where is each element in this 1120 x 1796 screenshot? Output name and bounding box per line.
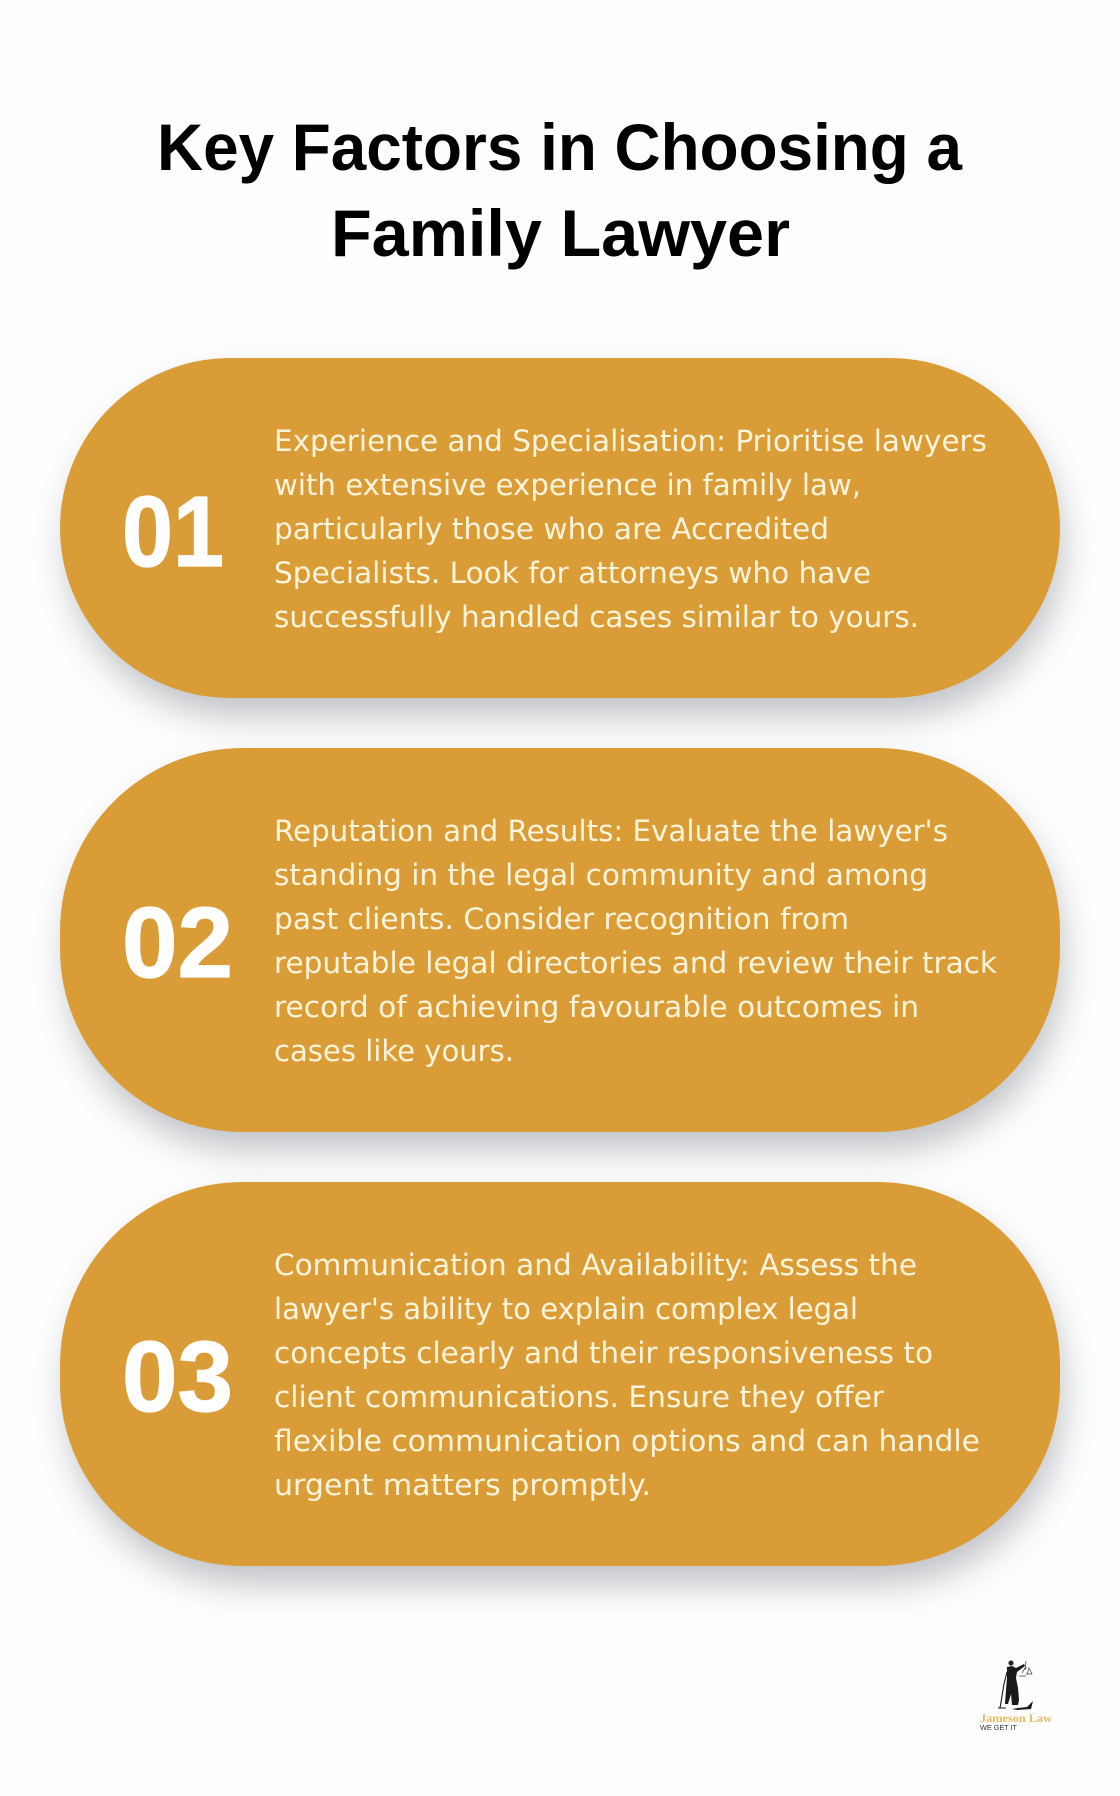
- text block 01: Specialists. Look for attorneys who have: [274, 556, 871, 590]
- text block 02: reputable legal directories and review their track: [274, 946, 997, 980]
- pill background 02: [60, 748, 1060, 1132]
- logo: Jameson Law: [980, 1660, 1053, 1732]
- number 01: 01: [122, 476, 224, 588]
- text block 03: client communications. Ensure they offer: [274, 1380, 884, 1414]
- text block 03: [274, 1248, 980, 1502]
- panel: factor 01: [60, 358, 1062, 716]
- title: Key Factors in Choosing a: [157, 110, 963, 184]
- logo tagline: WE GET IT: [980, 1723, 1017, 1732]
- text block 01: successfully handled cases similar to yours.: [274, 600, 919, 634]
- text block 02: record of achieving favourable outcomes in: [274, 990, 919, 1024]
- pill background 03: [60, 1182, 1060, 1566]
- text block 03: urgent matters promptly.: [274, 1468, 651, 1502]
- text block 02: cases like yours.: [274, 1034, 514, 1068]
- text block 03: Communication and Availability: Assess the: [274, 1248, 917, 1282]
- number 02: 02: [122, 887, 233, 999]
- text block 03: concepts clearly and their responsiveness to: [274, 1336, 933, 1370]
- number 03: 03: [122, 1321, 233, 1433]
- text block 01: Experience and Specialisation: Prioritise lawyers: [274, 424, 987, 458]
- text block 02: Reputation and Results: Evaluate the lawyer's: [274, 814, 948, 848]
- title: Family Lawyer: [331, 196, 790, 270]
- text block 02: past clients. Consider recognition from: [274, 902, 849, 936]
- panel: factor 02: [60, 748, 1062, 1150]
- text block 03: lawyer's ability to explain complex legal: [274, 1292, 858, 1326]
- text block 03: flexible communication options and can handle: [274, 1424, 980, 1458]
- text block 02: standing in the legal community and among: [274, 858, 928, 892]
- logo wordmark: Jameson Law: [980, 1713, 1053, 1725]
- text block 01: [274, 424, 987, 634]
- text block 01: particularly those who are Accredited: [274, 512, 829, 546]
- title: [157, 110, 963, 270]
- panel: factor 03: [60, 1182, 1062, 1584]
- pill background 01: [60, 358, 1060, 698]
- text block 01: with extensive experience in family law,: [274, 468, 861, 502]
- icon: lady justice: [998, 1660, 1033, 1710]
- text block 02: [274, 814, 997, 1068]
